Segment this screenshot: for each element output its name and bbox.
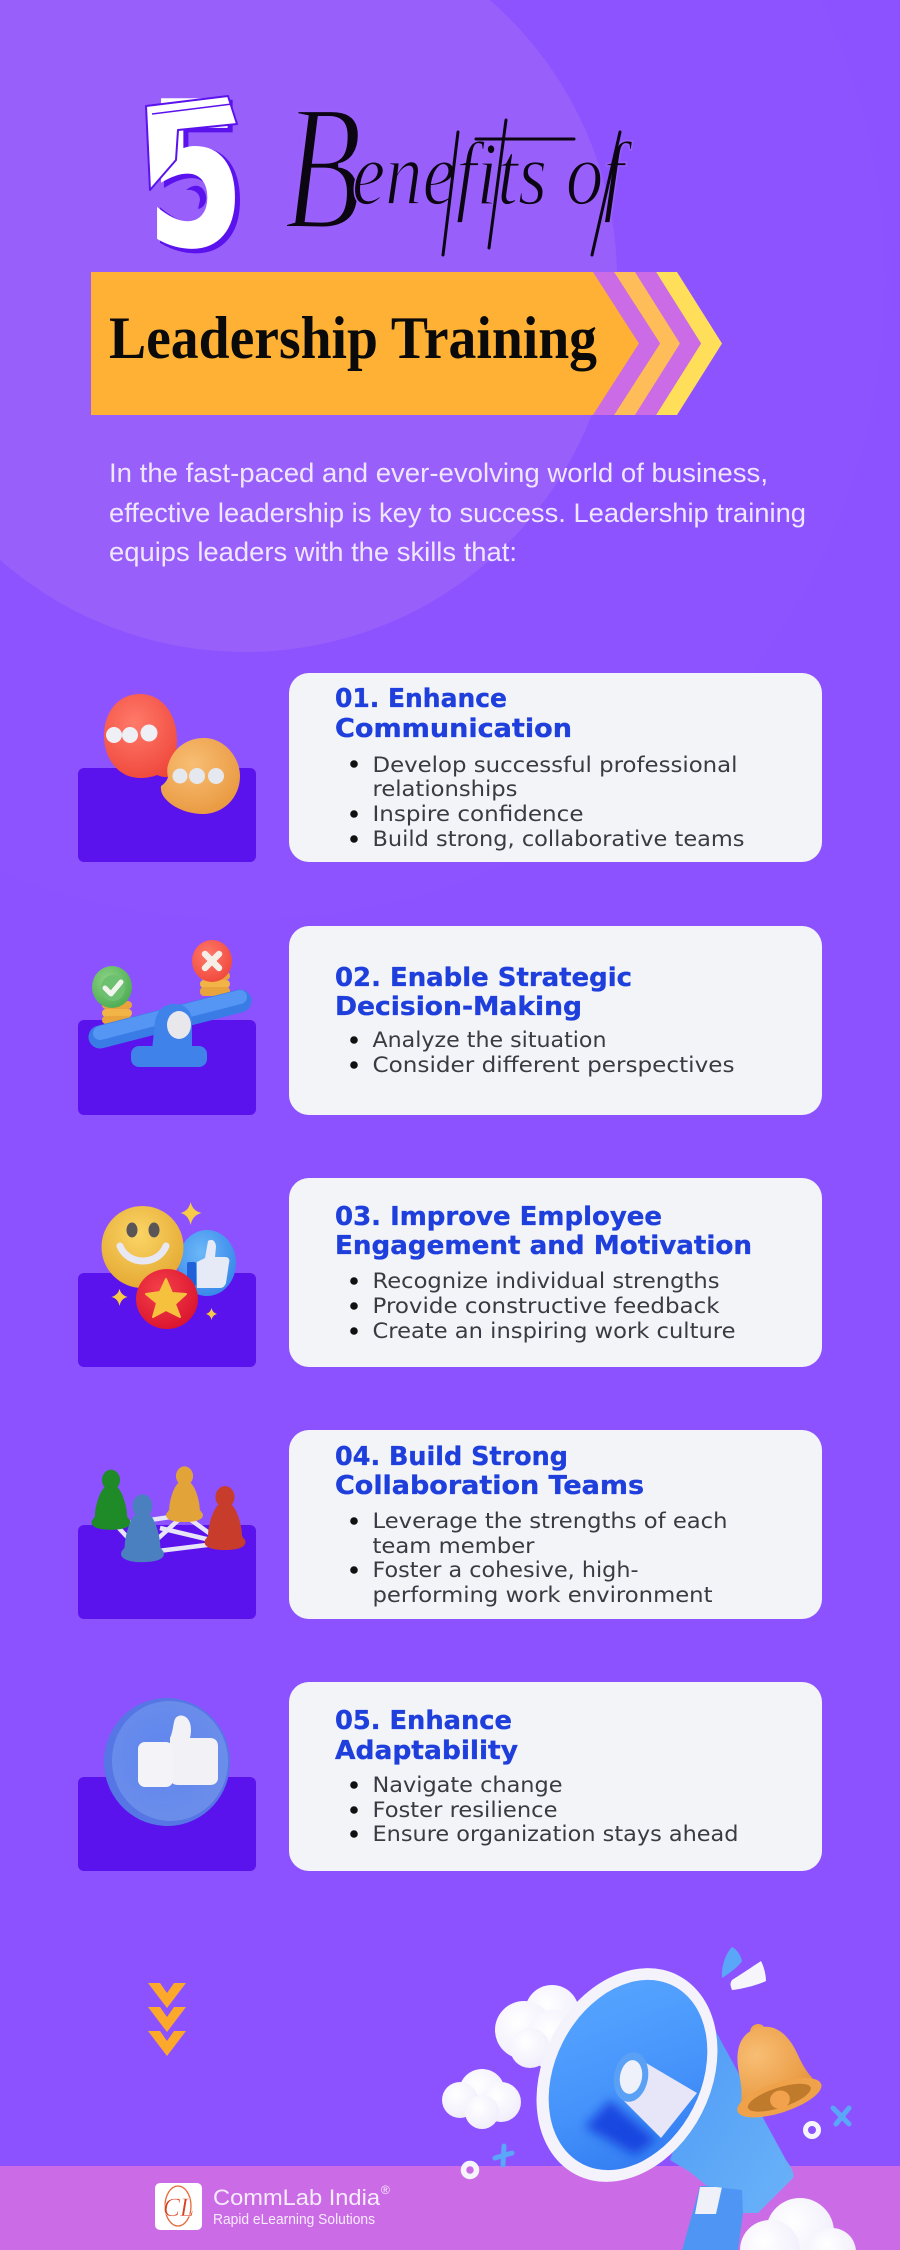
logo mark: CL: [163, 2193, 194, 2222]
script heading: enefits of: [352, 125, 633, 224]
footer band: [0, 2166, 900, 2250]
shard blue: [722, 1947, 742, 1978]
bullet list: [350, 1509, 728, 1607]
icon: speech bubbles: [104, 694, 240, 814]
bullet list: [350, 1269, 736, 1343]
icon: seesaw with check and cross: [92, 940, 240, 1067]
bullet list: performing work environment: [372, 1583, 712, 1607]
heading: 05. Enhance: [335, 1706, 512, 1736]
bullet list: team member: [372, 1534, 535, 1558]
heading: [335, 963, 632, 1022]
card: [289, 673, 822, 862]
card: [289, 1682, 822, 1871]
numeral 5: 5: [151, 63, 248, 296]
numeral 5: 5: [147, 60, 244, 293]
decor plus left: [495, 2146, 512, 2165]
heading: [335, 1442, 644, 1501]
arrow: triple chevron down: [148, 1983, 186, 2056]
logo: CommLab India: [155, 2183, 390, 2230]
card: [289, 1178, 822, 1367]
bullet list: Analyze the situation: [372, 1028, 606, 1052]
heading: [335, 684, 572, 744]
bullet list: [350, 753, 744, 851]
bullet list: Leverage the strengths of each: [372, 1509, 728, 1533]
heading: 04. Build Strong: [335, 1442, 568, 1472]
card: [289, 1430, 822, 1619]
decor ring left: [464, 2164, 476, 2176]
heading: Communication: [335, 714, 572, 744]
bullet list: Create an inspiring work culture: [372, 1319, 736, 1343]
icon: team pawns network: [92, 1466, 245, 1562]
panel: benefit 04: [78, 1430, 822, 1619]
heading: Collaboration Teams: [335, 1471, 644, 1501]
bullet list: [350, 1773, 738, 1846]
heading: 02. Enable Strategic: [335, 963, 632, 993]
illustration: megaphone with clouds and bell: [442, 1937, 856, 2250]
cloud small: [442, 2069, 521, 2129]
intro text: In the fast-paced and ever-evolving world of business,: [109, 458, 768, 488]
heading: Decision-Making: [335, 992, 582, 1022]
bullet list: [350, 1028, 734, 1077]
intro text: equips leaders with the skills that:: [109, 537, 517, 567]
heading: Engagement and Motivation: [335, 1231, 752, 1261]
bullet list: Foster a cohesive, high-: [372, 1558, 638, 1582]
panel: benefit 02: [78, 926, 822, 1115]
intro text: effective leadership is key to success. Leadership training: [109, 498, 806, 528]
bullet list: Inspire confidence: [372, 802, 584, 826]
bullet list: Build strong, collaborative teams: [372, 827, 744, 851]
logo: CommLab India: ®: [381, 2183, 390, 2197]
heading: 01. Enhance: [335, 684, 507, 714]
inner tube: [585, 2049, 697, 2155]
bullet list: Consider different perspectives: [372, 1053, 734, 1077]
bullet list: Develop successful professional: [372, 753, 738, 777]
heading: 03. Improve Employee: [335, 1202, 662, 1232]
decor ring right: [806, 2124, 818, 2136]
handle: [682, 2186, 760, 2250]
logo: CommLab India: Rapid eLearning Solutions: [213, 2212, 375, 2228]
title: 5 Benefits of: [146, 60, 633, 296]
decor cross right: [833, 2108, 849, 2124]
panel: benefit 01: [78, 673, 822, 862]
script heading: B: [284, 68, 362, 267]
megaphone rim and mouth: [501, 1937, 753, 2213]
bell: [714, 2011, 826, 2126]
heading: Adaptability: [335, 1736, 518, 1766]
script heading: [284, 68, 633, 267]
bullet list: Provide constructive feedback: [372, 1294, 720, 1318]
panel: benefit 05: [78, 1682, 822, 1871]
bullet list: Ensure organization stays ahead: [372, 1822, 738, 1846]
panel: benefit 03: [78, 1178, 822, 1367]
card: [289, 926, 822, 1115]
heading: [335, 1706, 518, 1766]
shard white: [730, 1961, 766, 1990]
icon: smiley, thumbs up and star: [102, 1202, 236, 1329]
bullet list: Navigate change: [372, 1773, 562, 1797]
cloud bottom: [740, 2198, 856, 2250]
intro text: [109, 458, 806, 567]
title banner: Leadership Training: [91, 272, 722, 415]
logo mark: [155, 2183, 202, 2230]
title banner: Leadership Training: Leadership Training: [109, 305, 597, 371]
bullet list: relationships: [372, 777, 518, 801]
megaphone body: [670, 2030, 794, 2213]
heading: [335, 1202, 752, 1261]
cloud back: [495, 1985, 585, 2070]
bullet list: Recognize individual strengths: [372, 1269, 720, 1293]
icon: thumbs up disc: [96, 1690, 238, 1834]
logo: CommLab India: CommLab India: [213, 2185, 381, 2210]
bullet list: Foster resilience: [372, 1798, 558, 1822]
